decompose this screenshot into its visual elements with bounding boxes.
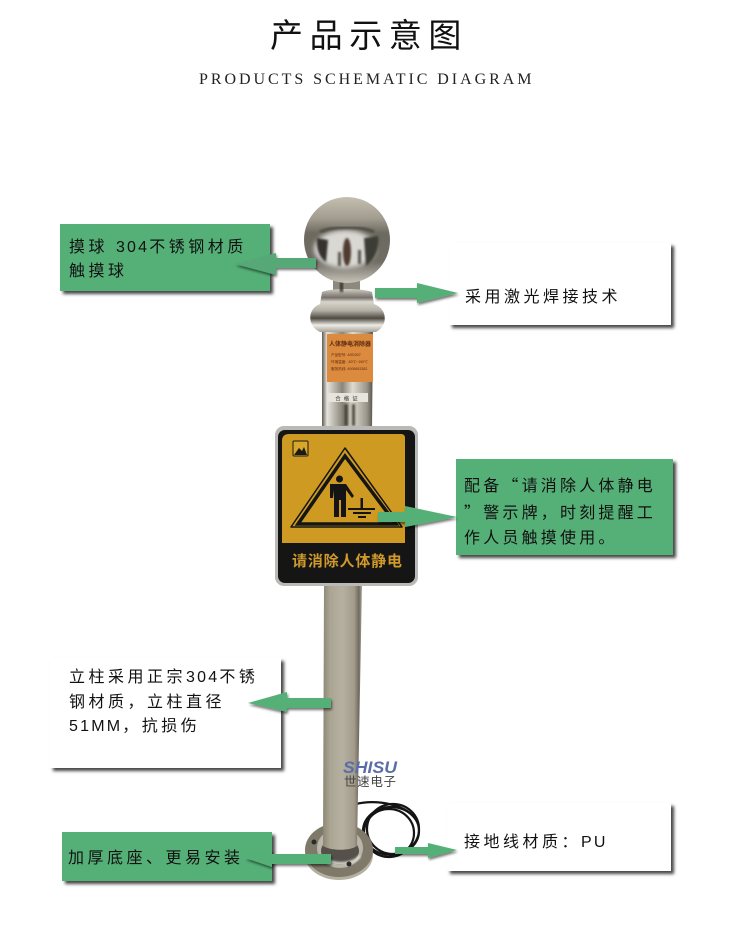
person and ground symbol — [330, 476, 375, 518]
callout: warning sign — [456, 459, 673, 555]
callout: laser welding — [449, 243, 671, 325]
callout: touch ball — [60, 224, 270, 291]
callout text: touch ball: 触摸球 — [69, 263, 128, 280]
callout text: warning sign — [464, 472, 656, 547]
warning sign — [275, 426, 418, 586]
callout text: warning sign: 配备“请消除人体静电 — [464, 472, 656, 496]
callout text: column material: 钢材质，立柱直径 — [69, 694, 225, 710]
subtitle: PRODUCTS SCHEMATIC DIAGRAM — [199, 71, 534, 88]
pole lower section — [323, 585, 362, 850]
callout text: thick base: 加厚底座、更易安装 — [68, 850, 244, 867]
arrow: touch ball — [235, 253, 316, 275]
sign text: 请消除人体静电 — [292, 552, 402, 570]
callout: thick base — [62, 832, 272, 881]
title: 产品示意图 — [270, 17, 468, 54]
collar — [310, 278, 385, 332]
pole upper section — [322, 328, 373, 430]
ground cable — [356, 802, 419, 857]
arrow: thick base — [245, 850, 331, 867]
callout text: laser welding: 采用激光焊接技术 — [465, 289, 621, 306]
label band: 合格证 — [335, 394, 361, 402]
callout text: column material: 立柱采用正宗304不锈 — [69, 669, 258, 686]
callout text: warning sign: 作人员触摸使用。 — [464, 530, 618, 547]
ball — [304, 197, 390, 283]
label band: 人体静电消除器 — [329, 340, 371, 348]
callout text: column material: 51MM，抗损伤 — [69, 718, 200, 735]
callout: column material — [50, 658, 281, 768]
mountain icon — [293, 441, 308, 456]
callout: ground wire — [447, 803, 671, 871]
touch ball and collar — [304, 197, 390, 426]
label band: 产品型号: ASD007 — [331, 352, 361, 357]
callout text: warning sign: ”警示牌，时刻提醒工 — [464, 499, 656, 523]
label band: 服务热线: 4006653382 — [331, 366, 367, 371]
brand logo: 世速电子 — [344, 775, 396, 789]
warning triangle — [291, 448, 402, 527]
label band: 环境温度: -50℃~100℃ — [331, 359, 368, 364]
arrow: laser welding — [375, 283, 458, 303]
base flange — [305, 823, 373, 880]
arrow: warning sign — [378, 506, 457, 527]
brand logo: SHISU — [343, 758, 398, 777]
callout text: column material — [69, 668, 258, 735]
callout text: ground wire: 接地线材质：PU — [464, 834, 608, 851]
arrow: ground wire — [395, 843, 457, 858]
arrow: column — [248, 692, 331, 712]
pole — [322, 328, 373, 850]
callout text: touch ball — [69, 238, 247, 280]
callout text: touch ball: 摸球 304不锈钢材质 — [69, 239, 247, 256]
brand logo — [343, 758, 398, 789]
label band — [327, 334, 373, 426]
